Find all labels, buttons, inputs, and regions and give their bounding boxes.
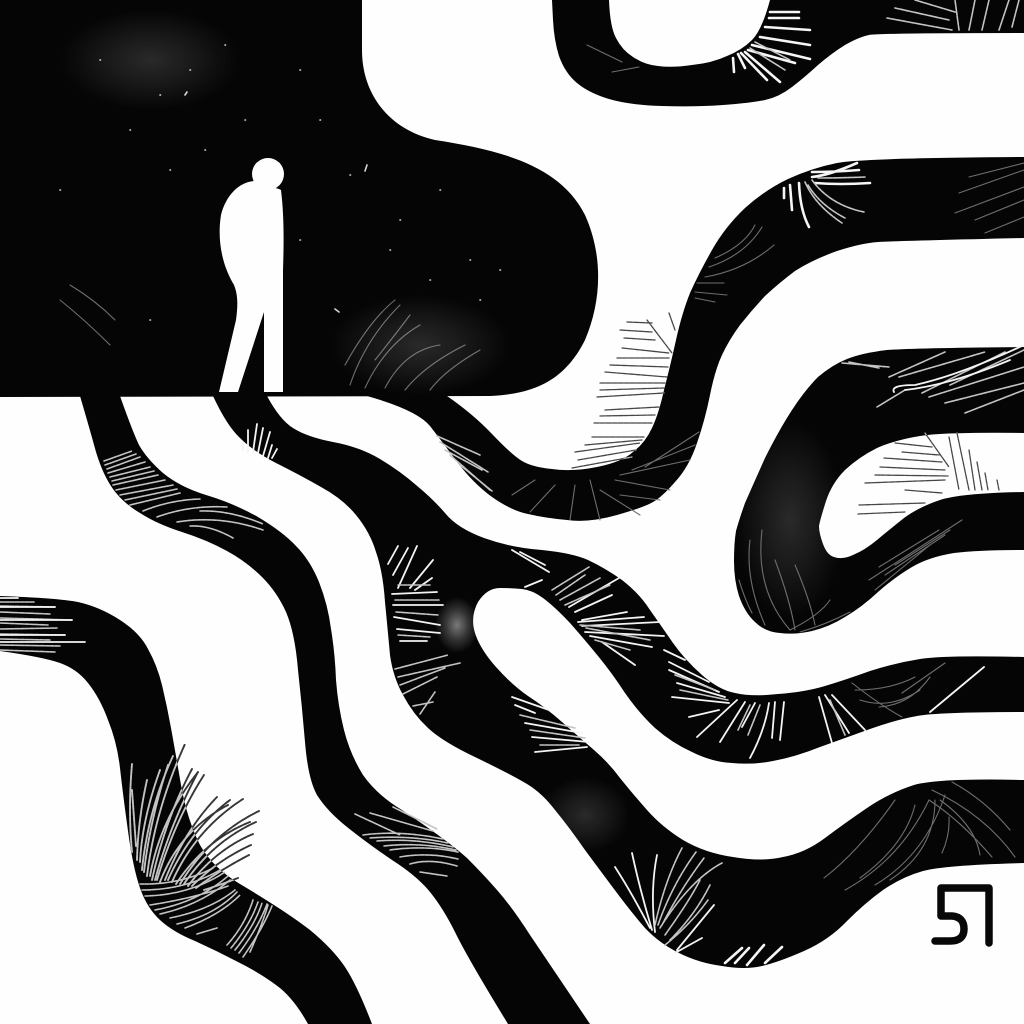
river: forked central [213, 396, 1024, 968]
river: second from left [80, 396, 590, 1024]
figure head [252, 158, 284, 190]
feather marks: lower fork [512, 697, 589, 752]
walking figure [219, 158, 284, 392]
feather marks: second river lower [355, 807, 458, 876]
dark void blob [0, 0, 598, 397]
feather marks: small river near void [437, 436, 492, 491]
feather marks: right loop lower left [739, 520, 962, 632]
feather marks: central fork [512, 550, 664, 665]
logo mark 51 [935, 888, 989, 943]
feather on white inside right loop [858, 433, 999, 514]
feather marks: bottom left fan [130, 744, 272, 957]
feather marks: right loop top [842, 345, 1024, 413]
feather marks: top loop [587, 0, 1019, 82]
feather marks: far right arcs [824, 782, 1015, 890]
haze patches [60, 10, 845, 853]
river: top right loop [552, 0, 1024, 106]
river: far left [0, 596, 372, 1024]
river: from void to upper right [367, 157, 1024, 521]
feather marks: lower fan [615, 848, 782, 965]
feather marks: second river upper [104, 451, 263, 538]
feather marks: central left [388, 546, 460, 714]
feather marks: left river end [0, 598, 85, 652]
feather marks: central small fan [243, 424, 277, 458]
figure body and legs [219, 181, 284, 392]
feather marks: upper river [695, 163, 1024, 302]
feather marks: central right arm [664, 650, 984, 758]
river: right loop [734, 347, 1024, 634]
feather on white near river bend [572, 313, 675, 468]
feather marks: river bend below [512, 432, 699, 520]
